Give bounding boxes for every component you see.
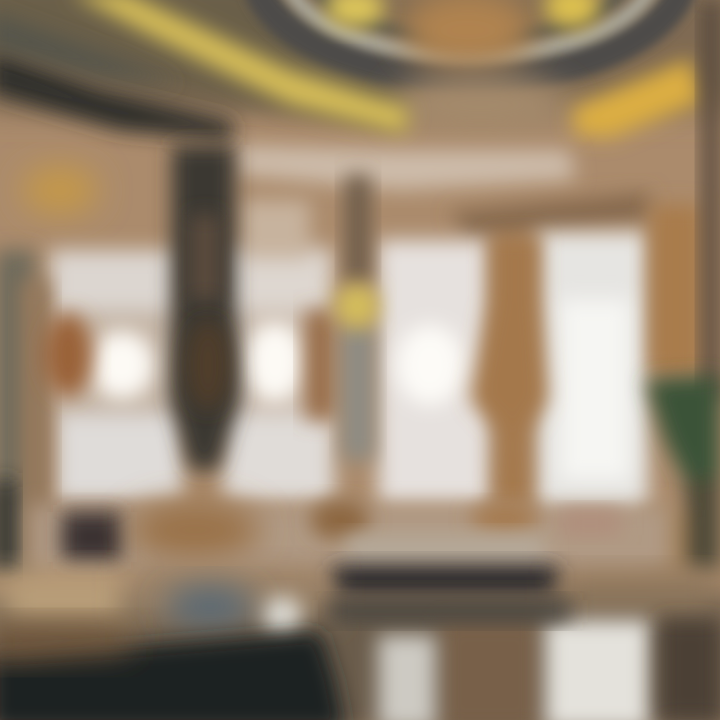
windows <box>50 200 648 512</box>
pale frieze <box>235 145 575 190</box>
dark column <box>170 145 240 470</box>
ceiling centre medallion <box>402 0 534 70</box>
window bright spots <box>90 300 630 480</box>
side ceiling shadow <box>450 192 650 240</box>
wood column <box>470 235 548 520</box>
columns <box>0 0 720 570</box>
plant <box>645 375 720 570</box>
orange accent <box>44 313 92 397</box>
ceiling rings <box>255 0 685 78</box>
dark sofa <box>330 565 560 599</box>
left column <box>0 250 35 570</box>
yellow lamp on column <box>335 284 379 328</box>
foreground dark sofa <box>0 632 345 720</box>
narrow bronze column <box>305 310 335 420</box>
floor reflections <box>444 628 536 716</box>
right wood column <box>650 205 702 375</box>
yellow wall lamp <box>22 166 98 214</box>
ceiling <box>0 0 720 140</box>
yellow ceiling lights <box>70 0 410 135</box>
lower seating zone <box>30 500 670 599</box>
floor <box>0 570 720 720</box>
dark beam <box>0 50 235 140</box>
slim grey column <box>345 175 371 285</box>
